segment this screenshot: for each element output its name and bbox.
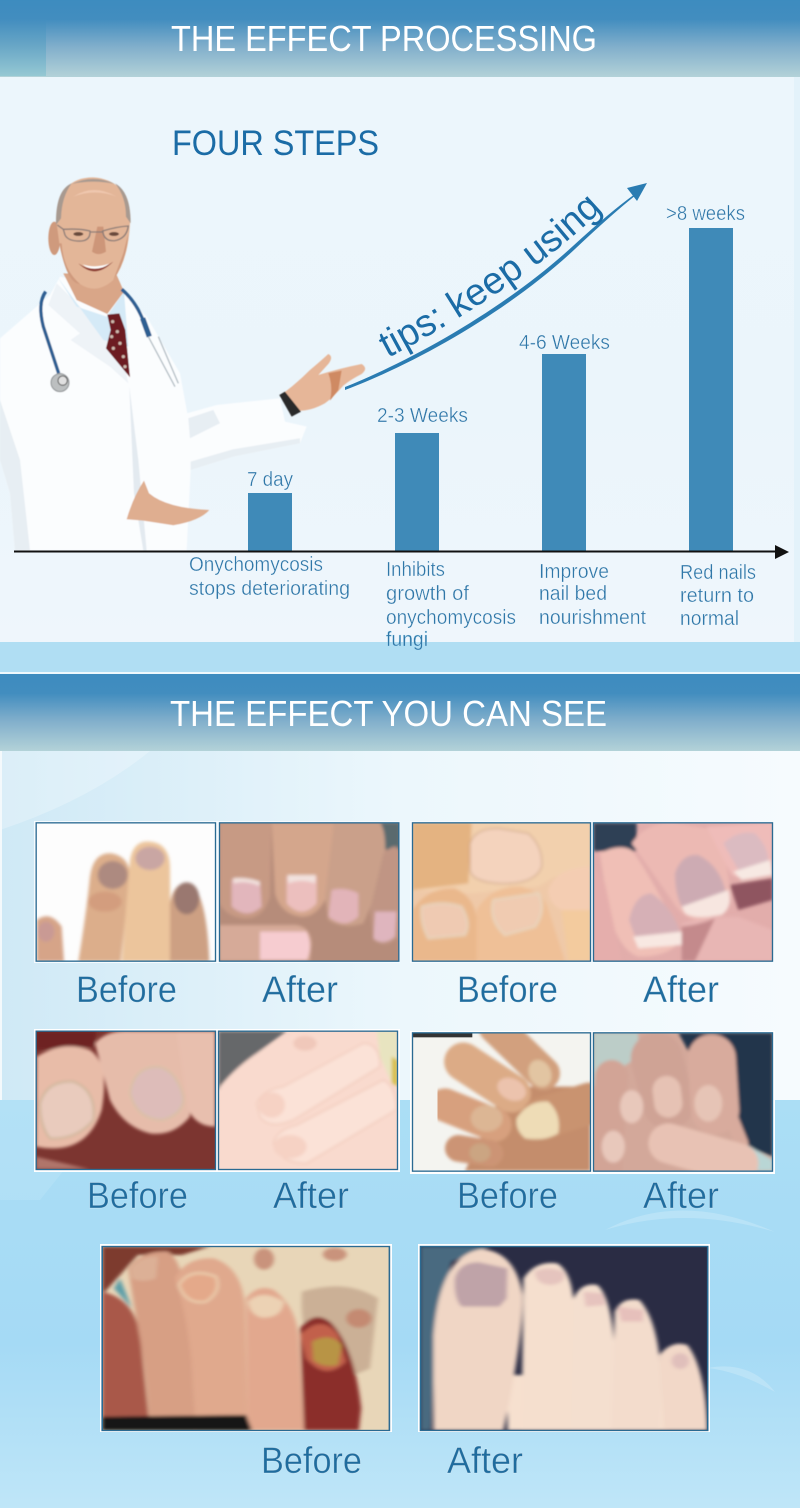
bar chart [14,203,789,651]
head [48,177,131,289]
step text: 4-6 weeks: nourishment [539,607,646,629]
arrow: rising curve [345,183,647,390]
hand: lower [127,481,209,525]
photos: rows one and two left [36,823,400,1169]
photo: toes after [420,1246,708,1430]
labels: before and after: After [643,1175,719,1216]
photos: rows one and two right [412,823,773,1177]
neck [63,273,124,314]
shirt collar [57,277,128,347]
illustration: doctor [0,177,365,551]
bar: >8 weeks [689,228,733,551]
photo: before 2 (row 2) [36,1031,215,1169]
header band: effect you can see [0,674,800,751]
photo: after 1 [219,823,400,961]
bar value labels: 4-6 Weeks [519,332,610,354]
header band: effect processing [0,0,800,77]
stethoscope [41,289,178,392]
photo: toes before [102,1246,389,1430]
labels: before and after: Before [76,969,177,1010]
title: the effect processing: THE EFFECT PROCESSING [171,18,597,59]
labels: before and after [76,969,719,1481]
step text: 7 day: Onychomycosis [189,554,323,576]
step text: 4-6 weeks: Improve [539,561,609,583]
labels: before and after: Before [261,1440,362,1481]
step text: 7 day [189,554,350,600]
step text: >8 weeks: return to [680,585,754,607]
labels: before and after: After [447,1440,523,1481]
labels: before and after: Before [87,1175,188,1216]
hand: upper [279,354,365,417]
photo: before 1 [36,840,212,960]
doctor coat [0,277,307,551]
tip text: keep using: tips: keep using [378,196,604,356]
step text: 4-6 weeks: nail bed [539,583,607,605]
step text: 2-3 weeks: Inhibits [386,559,445,581]
bar value labels: 2-3 Weeks [377,405,468,427]
step text: 2-3 weeks: fungi [386,629,428,651]
heading: four steps: FOUR STEPS [172,124,379,163]
step text: >8 weeks: Red nails [680,562,756,584]
title: the effect you can see: THE EFFECT YOU CAN SEE [170,693,607,734]
step text: 4-6 weeks [539,561,646,629]
step text: 2-3 weeks [386,559,516,651]
bar: 4-6 weeks [542,354,586,551]
panel: chart background [0,77,800,642]
step text: >8 weeks: normal [680,608,739,630]
bar: 7 day [248,493,292,551]
labels: before and after: Before [457,1175,558,1216]
photos: toes [102,1246,708,1430]
photo frames [34,821,775,1432]
labels: before and after: After [273,1175,349,1216]
bar value labels: >8 weeks [666,203,745,225]
step text: 2-3 weeks: growth of [386,583,469,605]
glasses [57,225,128,241]
labels: before and after: After [262,969,338,1010]
tie [106,313,130,377]
labels: before and after: After [643,969,719,1010]
photo: before 4 [412,1027,590,1171]
labels: before and after: Before [457,969,558,1010]
photo: after 4 [593,1033,773,1177]
step text: 7 day: stops deteriorating [189,578,350,600]
bar value labels: 7 day [247,469,293,491]
step text: 2-3 weeks: onychomycosis [386,607,516,629]
photo: after 3 [593,823,773,961]
photo: after 2 (row 2) [218,1031,398,1169]
step text: >8 weeks [680,562,756,630]
photo: before 3 [412,823,590,961]
axis arrow [14,545,789,559]
bar value labels [247,203,745,491]
panel: results background [0,642,800,1508]
bar: 2-3 weeks [395,433,439,551]
